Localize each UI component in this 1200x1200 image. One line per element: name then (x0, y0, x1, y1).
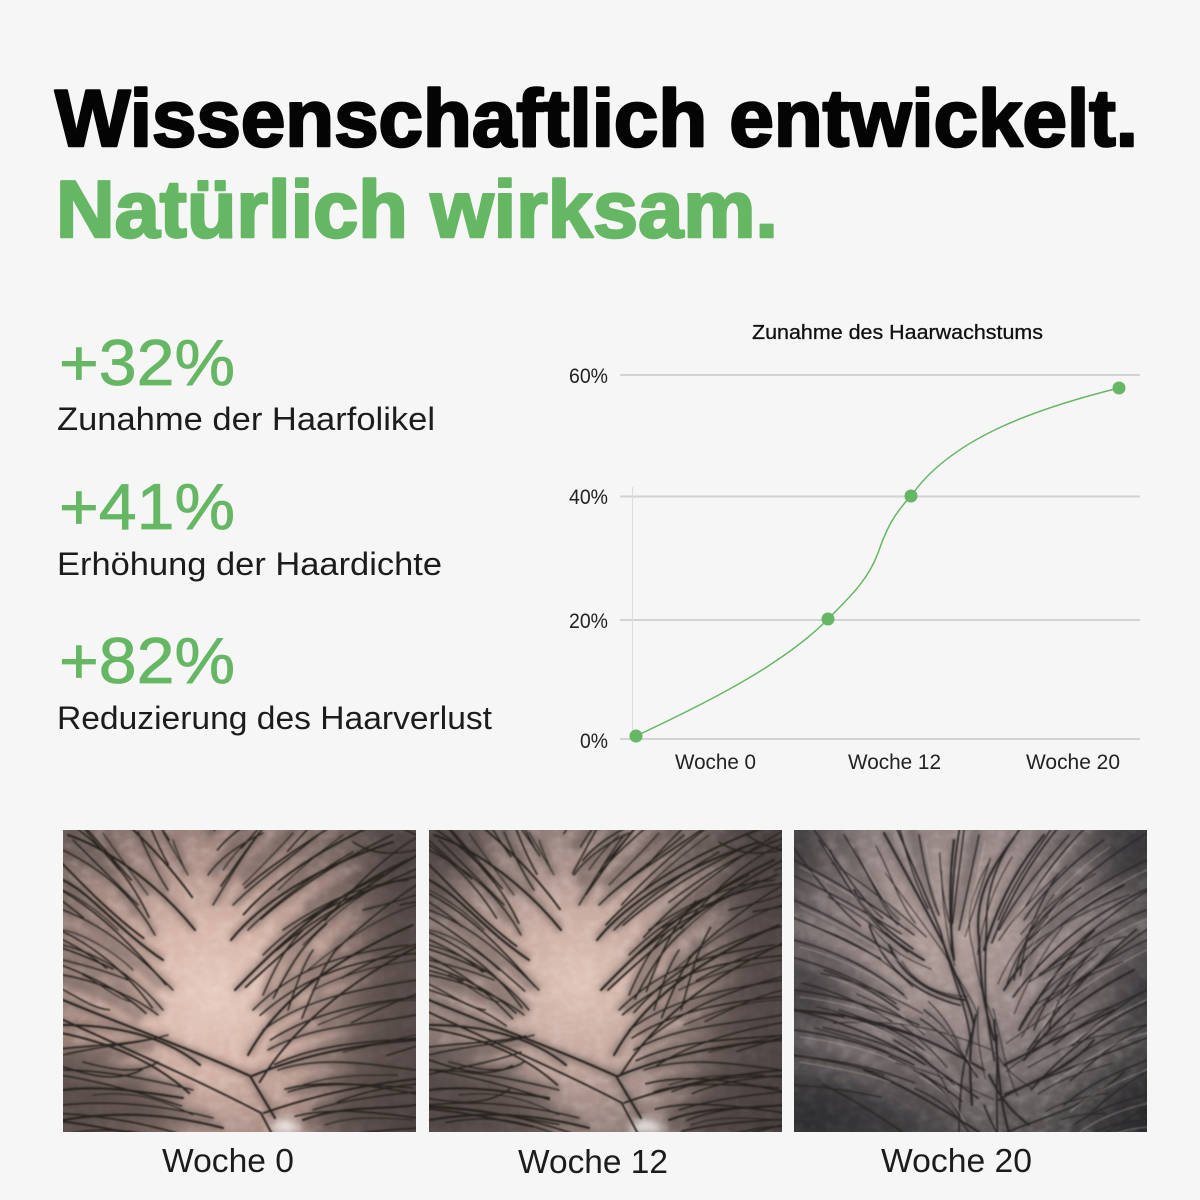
photo: scalp at week 0 (63, 830, 416, 1132)
photo: scalp at week 20 (794, 830, 1147, 1132)
x axis labels: Woche 0 (675, 751, 756, 774)
stat: hair follicles: Zunahme der Haarfolikel (57, 401, 435, 437)
stat: hair follicles (57, 326, 435, 437)
photo captions: Woche 12 (518, 1143, 668, 1180)
stat: hair follicles: +32% (59, 326, 235, 399)
stat: hair density: Erhöhung der Haardichte (57, 546, 442, 582)
stat: hair density: +41% (59, 470, 235, 543)
data points (630, 382, 1126, 742)
title (55, 74, 1138, 255)
title line: black: Wissenschaftlich entwickelt. (55, 74, 1138, 164)
x axis labels: Woche 12 (848, 751, 941, 774)
line chart: hair growth (569, 322, 1140, 774)
stat: hair loss: +82% (59, 624, 235, 697)
growth curve (636, 388, 1119, 736)
y axis labels: 40% (569, 486, 608, 509)
photo captions (162, 1142, 1032, 1180)
y axis labels (569, 365, 608, 753)
y axis labels: 0% (580, 730, 608, 753)
photo captions: Woche 0 (162, 1142, 294, 1179)
photo captions: Woche 20 (881, 1142, 1032, 1179)
chart title: Zunahme des Haarwachstums (752, 322, 1043, 344)
y axis labels: 60% (569, 365, 608, 388)
stat: hair density (57, 470, 442, 582)
stat: hair loss: Reduzierung des Haarverlust (57, 700, 492, 736)
stats panel (57, 326, 492, 736)
x axis labels (675, 751, 1120, 774)
stat: hair loss (57, 624, 492, 736)
title line: green: Natürlich wirksam. (56, 165, 778, 255)
x axis labels: Woche 20 (1026, 751, 1120, 774)
y axis labels: 20% (569, 610, 608, 633)
photo: scalp at week 12 (429, 830, 782, 1132)
